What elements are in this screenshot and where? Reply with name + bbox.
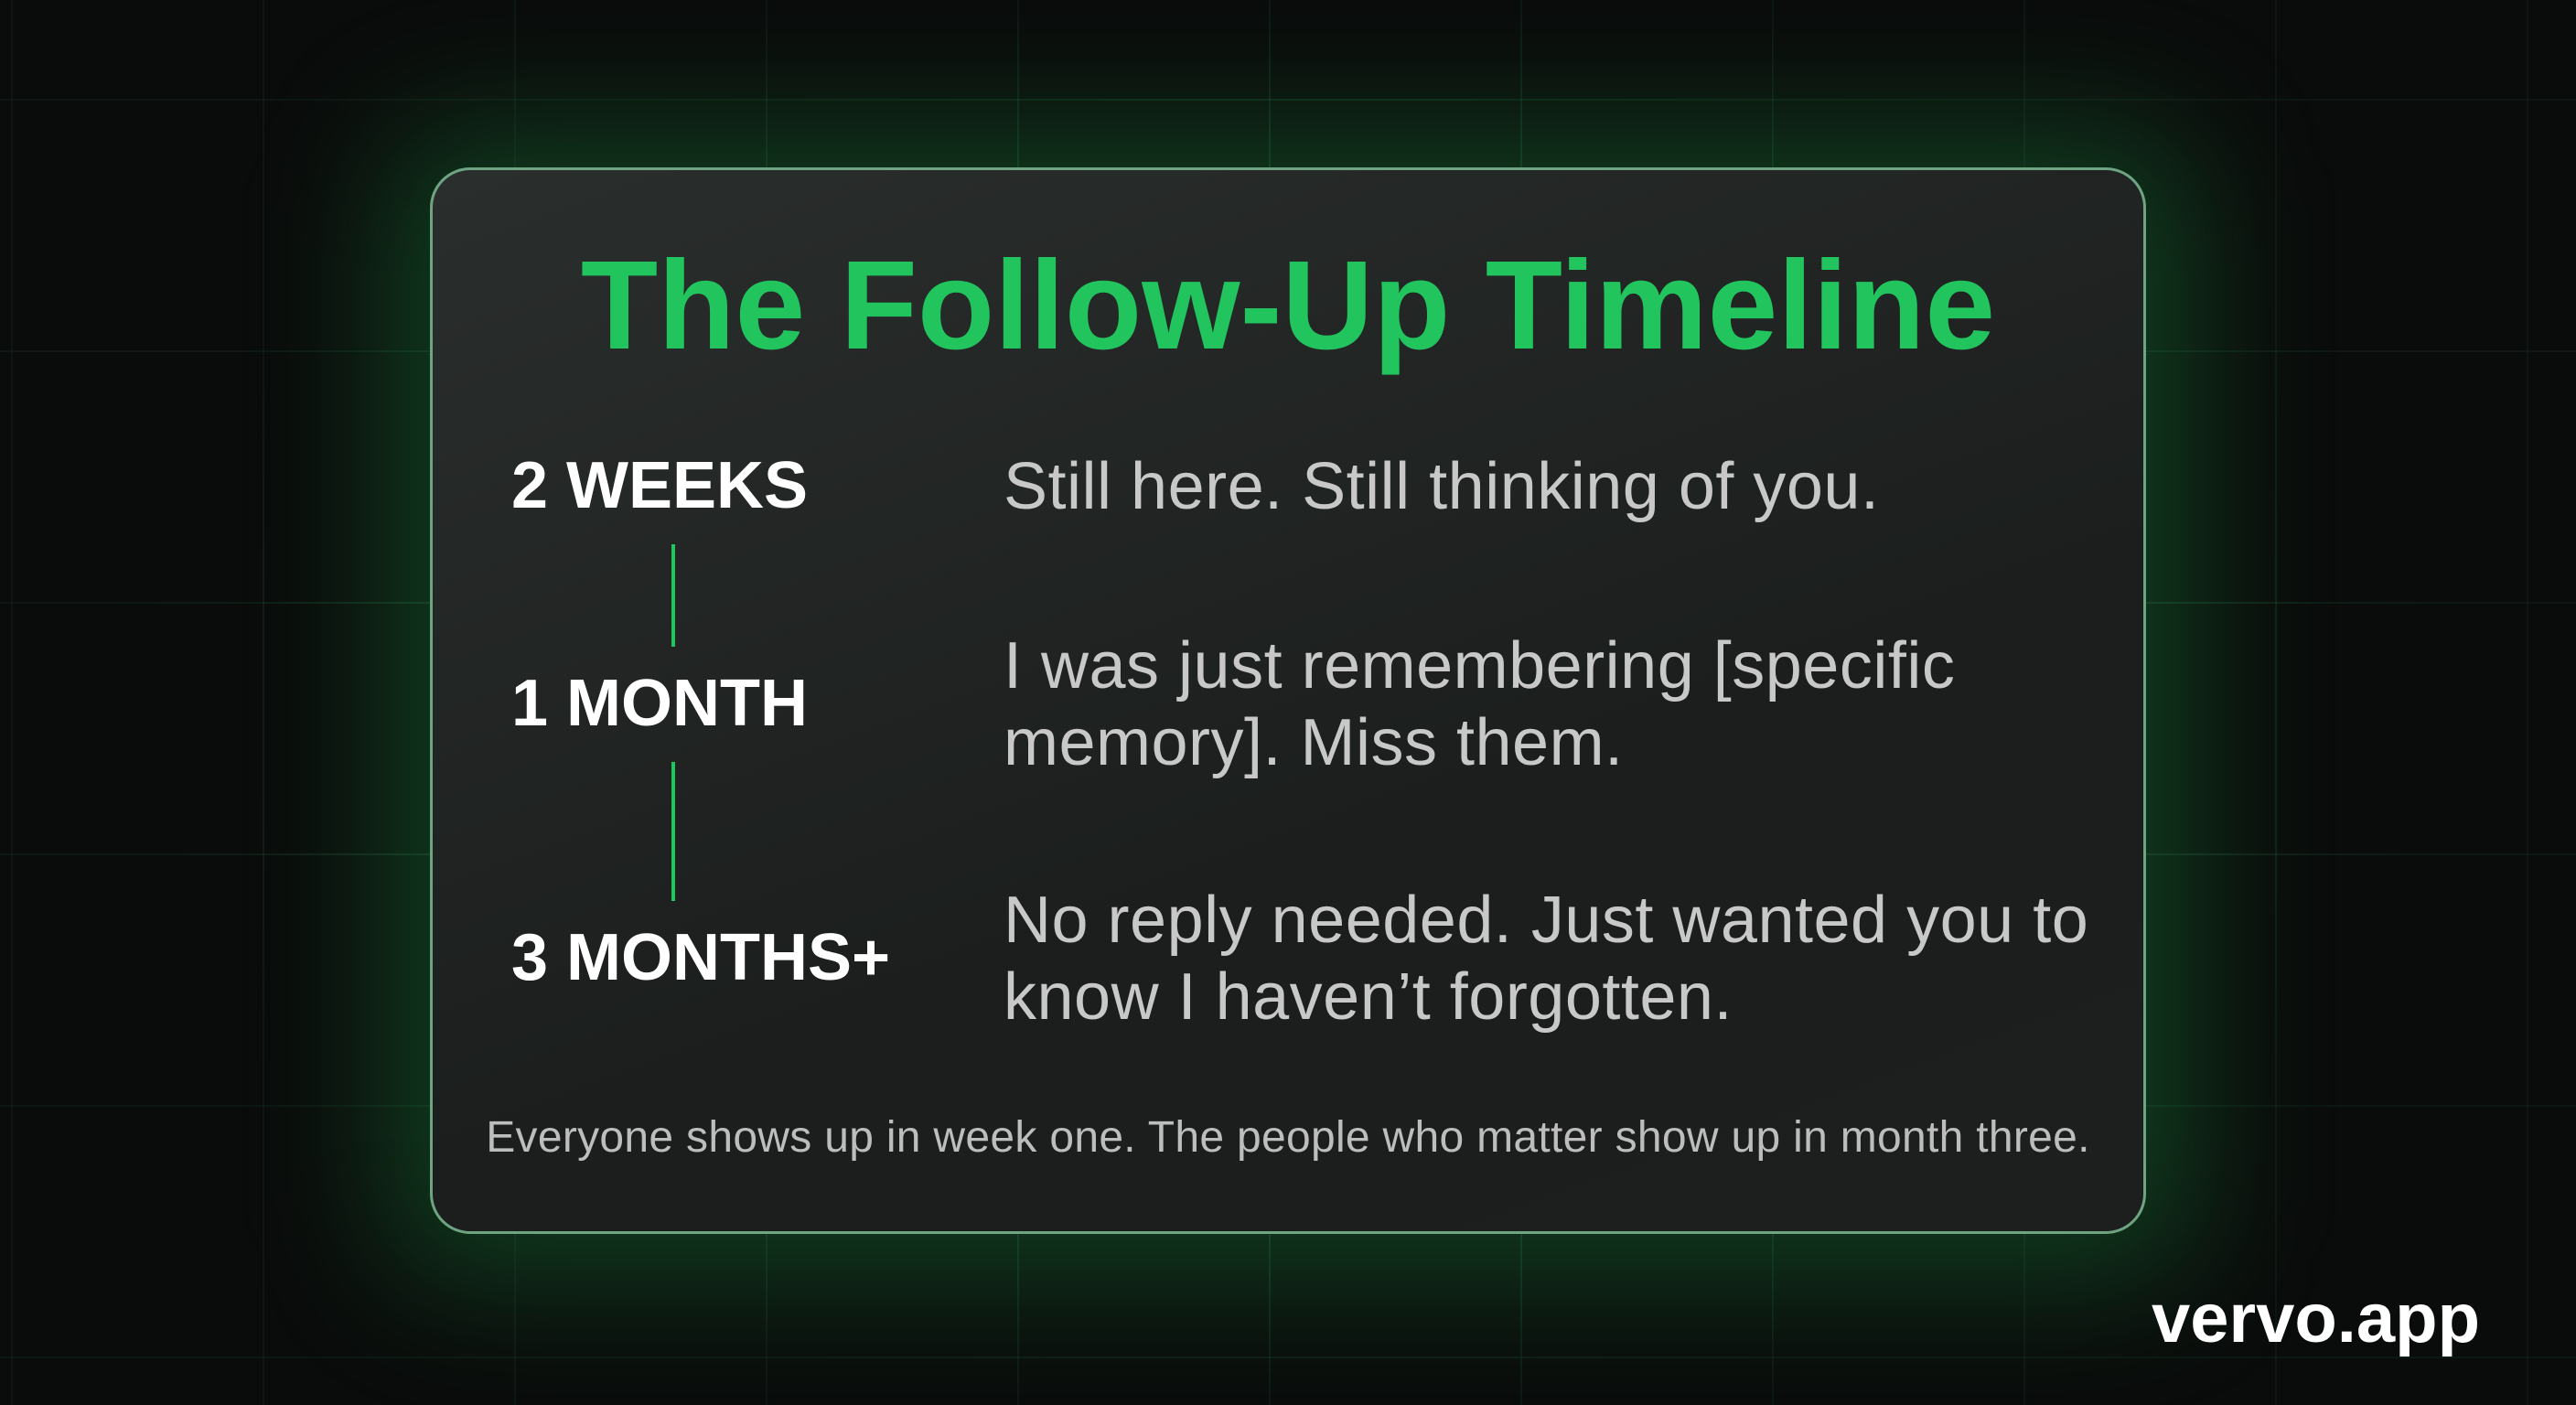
- label: 2 weeks: 2 WEEKS: [511, 449, 808, 522]
- panel: card: [430, 167, 2146, 1234]
- connector line 2: [671, 762, 675, 901]
- footer text: Everyone shows up in week one. The people who matter show up in month three.: [486, 1113, 2090, 1162]
- brand: vervo.app: [2152, 1280, 2480, 1357]
- message: 3 months: [1004, 884, 2088, 1034]
- message: 1 month: [1004, 629, 1955, 779]
- title: The Follow-Up Timeline: [581, 235, 1995, 376]
- message: 1 month: I was just remembering [specific: [1004, 629, 1955, 702]
- label: 1 month: 1 MONTH: [511, 667, 808, 740]
- message: 3 months: No reply needed. Just wanted you to: [1004, 884, 2088, 957]
- message: 1 month: memory]. Miss them.: [1004, 706, 1624, 779]
- label: 3 months: 3 MONTHS+: [511, 921, 890, 994]
- message: 2 weeks: Still here. Still thinking of you.: [1004, 450, 1879, 523]
- connector line 1: [671, 544, 675, 647]
- message: 3 months: know I haven’t forgotten.: [1004, 960, 1733, 1034]
